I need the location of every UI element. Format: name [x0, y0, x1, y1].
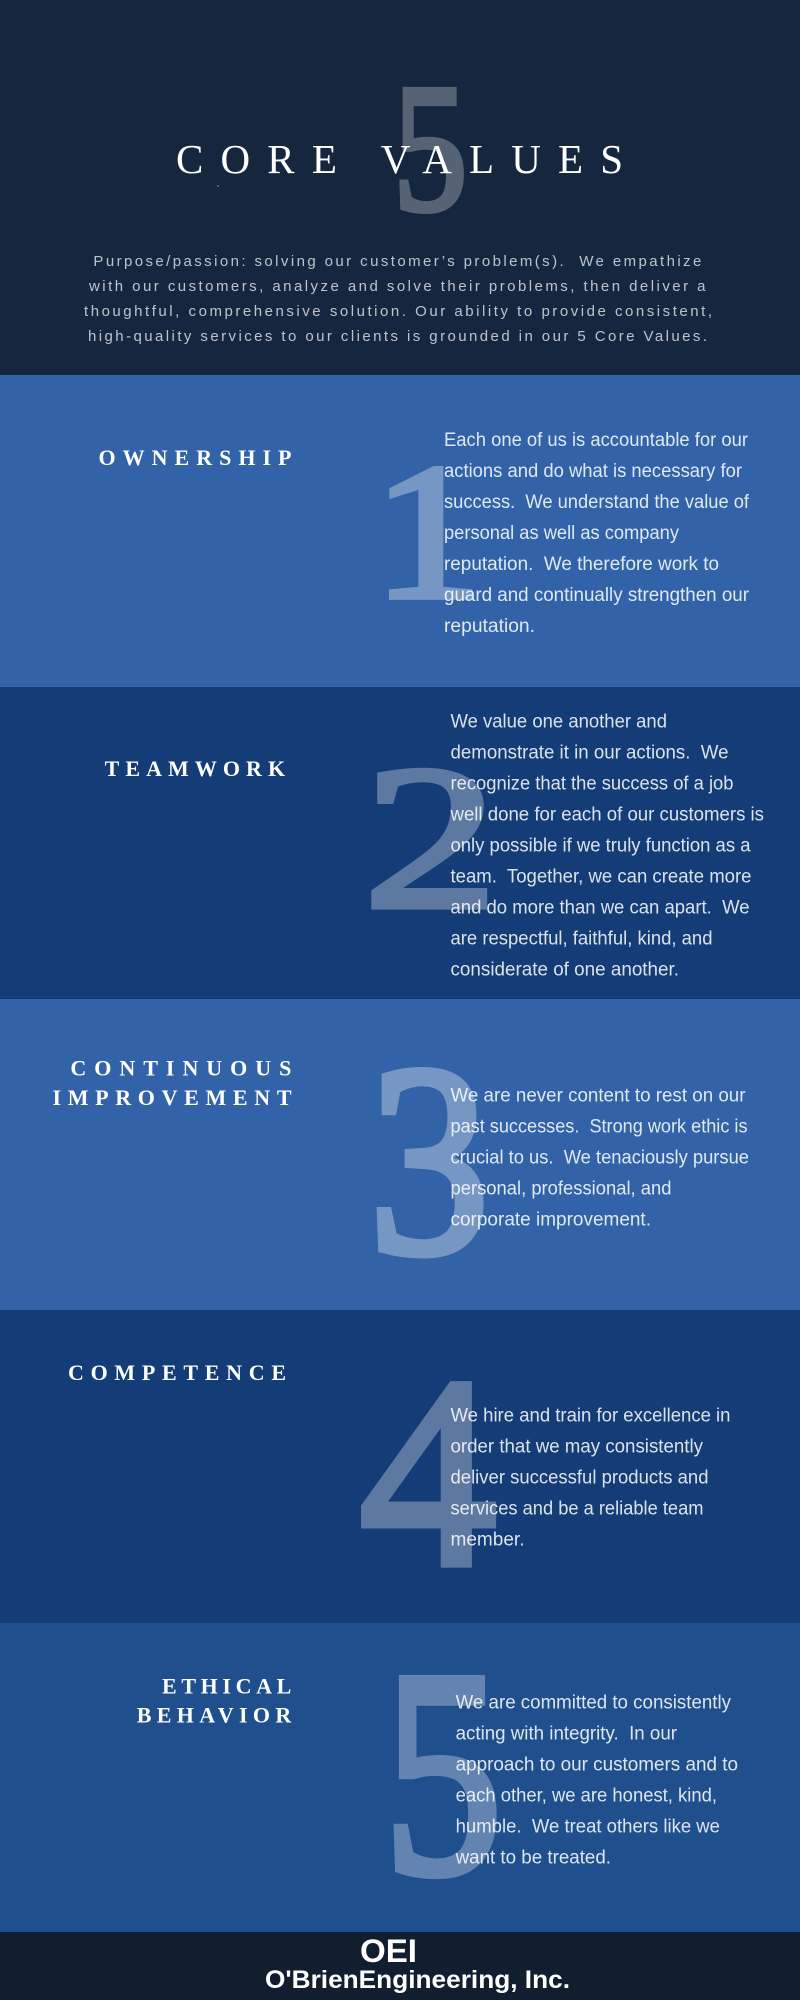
- panel: ethical behavior: [0, 1610, 800, 1936]
- heading: teamwork: TEAMWORK: [105, 756, 285, 781]
- body text: ownership: personal as well as company: [444, 523, 679, 544]
- numeral 1: 1: [373, 424, 482, 639]
- body text: continuous improvement: past successes. Strong work ethic is: [450, 1116, 748, 1137]
- body text: teamwork: only possible if we truly function as a: [450, 836, 751, 856]
- body text: competence: We hire and train for excellence in: [450, 1405, 730, 1426]
- body text: ownership: reputation. We therefore work to: [444, 554, 719, 575]
- body text: teamwork: considerate of one another.: [450, 960, 679, 980]
- body text: competence: deliver successful products and: [450, 1467, 708, 1488]
- intro text: Purpose/passion: solving our customer’s problem(s). We empathize: [93, 253, 701, 270]
- body text: ownership: actions and do what is necessary for: [444, 461, 743, 482]
- body text: competence: member.: [450, 1529, 524, 1550]
- numeral 5: 5: [383, 1610, 502, 1936]
- body text: ethical behavior: want to be treated.: [455, 1847, 611, 1868]
- body text: continuous improvement: [450, 1085, 749, 1230]
- numeral 3: 3: [369, 1009, 489, 1311]
- body text: continuous improvement: corporate improvement.: [450, 1209, 651, 1230]
- heading: ownership: OWNERSHIP: [98, 445, 292, 470]
- intro text: [84, 253, 712, 345]
- heading: ethical behavior: ETHICAL: [162, 1674, 291, 1699]
- title: CORE VALUES: [176, 136, 623, 182]
- body text: teamwork: and do more than we can apart. We: [450, 898, 750, 918]
- body text: ownership: Each one of us is accountable for our: [444, 430, 749, 451]
- body text: ownership: success. We understand the value of: [444, 492, 750, 513]
- heading: ethical behavior: BEHAVIOR: [137, 1703, 292, 1728]
- numeral 2: 2: [364, 724, 498, 951]
- body text: continuous improvement: personal, professional, and: [450, 1178, 672, 1199]
- panel: continuous improvement: [0, 999, 800, 1311]
- body text: ownership: reputation.: [444, 616, 535, 637]
- body text: teamwork: are respectful, faithful, kind, and: [450, 928, 712, 950]
- body text: ethical behavior: each other, we are honest, kind,: [456, 1785, 717, 1806]
- panel: ownership: [0, 375, 800, 687]
- body text: competence: services and be a reliable team: [450, 1498, 704, 1519]
- body text: ethical behavior: approach to our customers and to: [456, 1754, 738, 1775]
- panel: competence: [0, 1310, 800, 1623]
- panel: header: [0, 0, 800, 375]
- footer company name: O'BrienEngineering, Inc.: [265, 1966, 570, 1994]
- heading: continuous improvement: [52, 1056, 292, 1110]
- body text: competence: order that we may consistently: [450, 1436, 703, 1457]
- heading: competence: COMPETENCE: [68, 1360, 286, 1385]
- footer logo text: OEI: OEI: [360, 1933, 417, 1969]
- body text: continuous improvement: crucial to us. We tenaciously pursue: [450, 1147, 749, 1168]
- body text: ethical behavior: acting with integrity. In our: [456, 1723, 678, 1744]
- intro text: thoughtful, comprehensive solution. Our ability to provide consistent,: [84, 303, 712, 320]
- heading: continuous improvement: IMPROVEMENT: [52, 1085, 292, 1110]
- panel: footer: [0, 1932, 800, 2000]
- body text: teamwork: recognize that the success of a job: [450, 774, 734, 794]
- body text: teamwork: well done for each of our customers is: [450, 804, 764, 826]
- panel: teamwork: [0, 687, 800, 999]
- body text: teamwork: team. Together, we can create more: [450, 866, 752, 888]
- body text: ethical behavior: humble. We treat others like we: [456, 1816, 720, 1837]
- numeral 4: 4: [360, 1322, 496, 1622]
- body text: competence: [450, 1405, 730, 1550]
- body text: ownership: [444, 430, 750, 637]
- intro text: with our customers, analyze and solve their problems, then deliver a: [88, 278, 706, 295]
- body text: ethical behavior: We are committed to consistently: [456, 1692, 731, 1713]
- heading: ethical behavior: [137, 1674, 292, 1728]
- body text: continuous improvement: We are never content to rest on our: [450, 1085, 746, 1106]
- big numeral 5 behind title: 5: [393, 47, 468, 250]
- intro text: high-quality services to our clients is grounded in our 5 Core Values.: [88, 328, 707, 345]
- body text: ownership: guard and continually strengthen our: [444, 585, 750, 606]
- body text: teamwork: [450, 712, 764, 980]
- heading: continuous improvement: CONTINUOUS: [70, 1056, 291, 1081]
- body text: teamwork: demonstrate it in our actions. We: [450, 742, 728, 764]
- body text: teamwork: We value one another and: [450, 712, 667, 732]
- body text: ethical behavior: [455, 1692, 738, 1868]
